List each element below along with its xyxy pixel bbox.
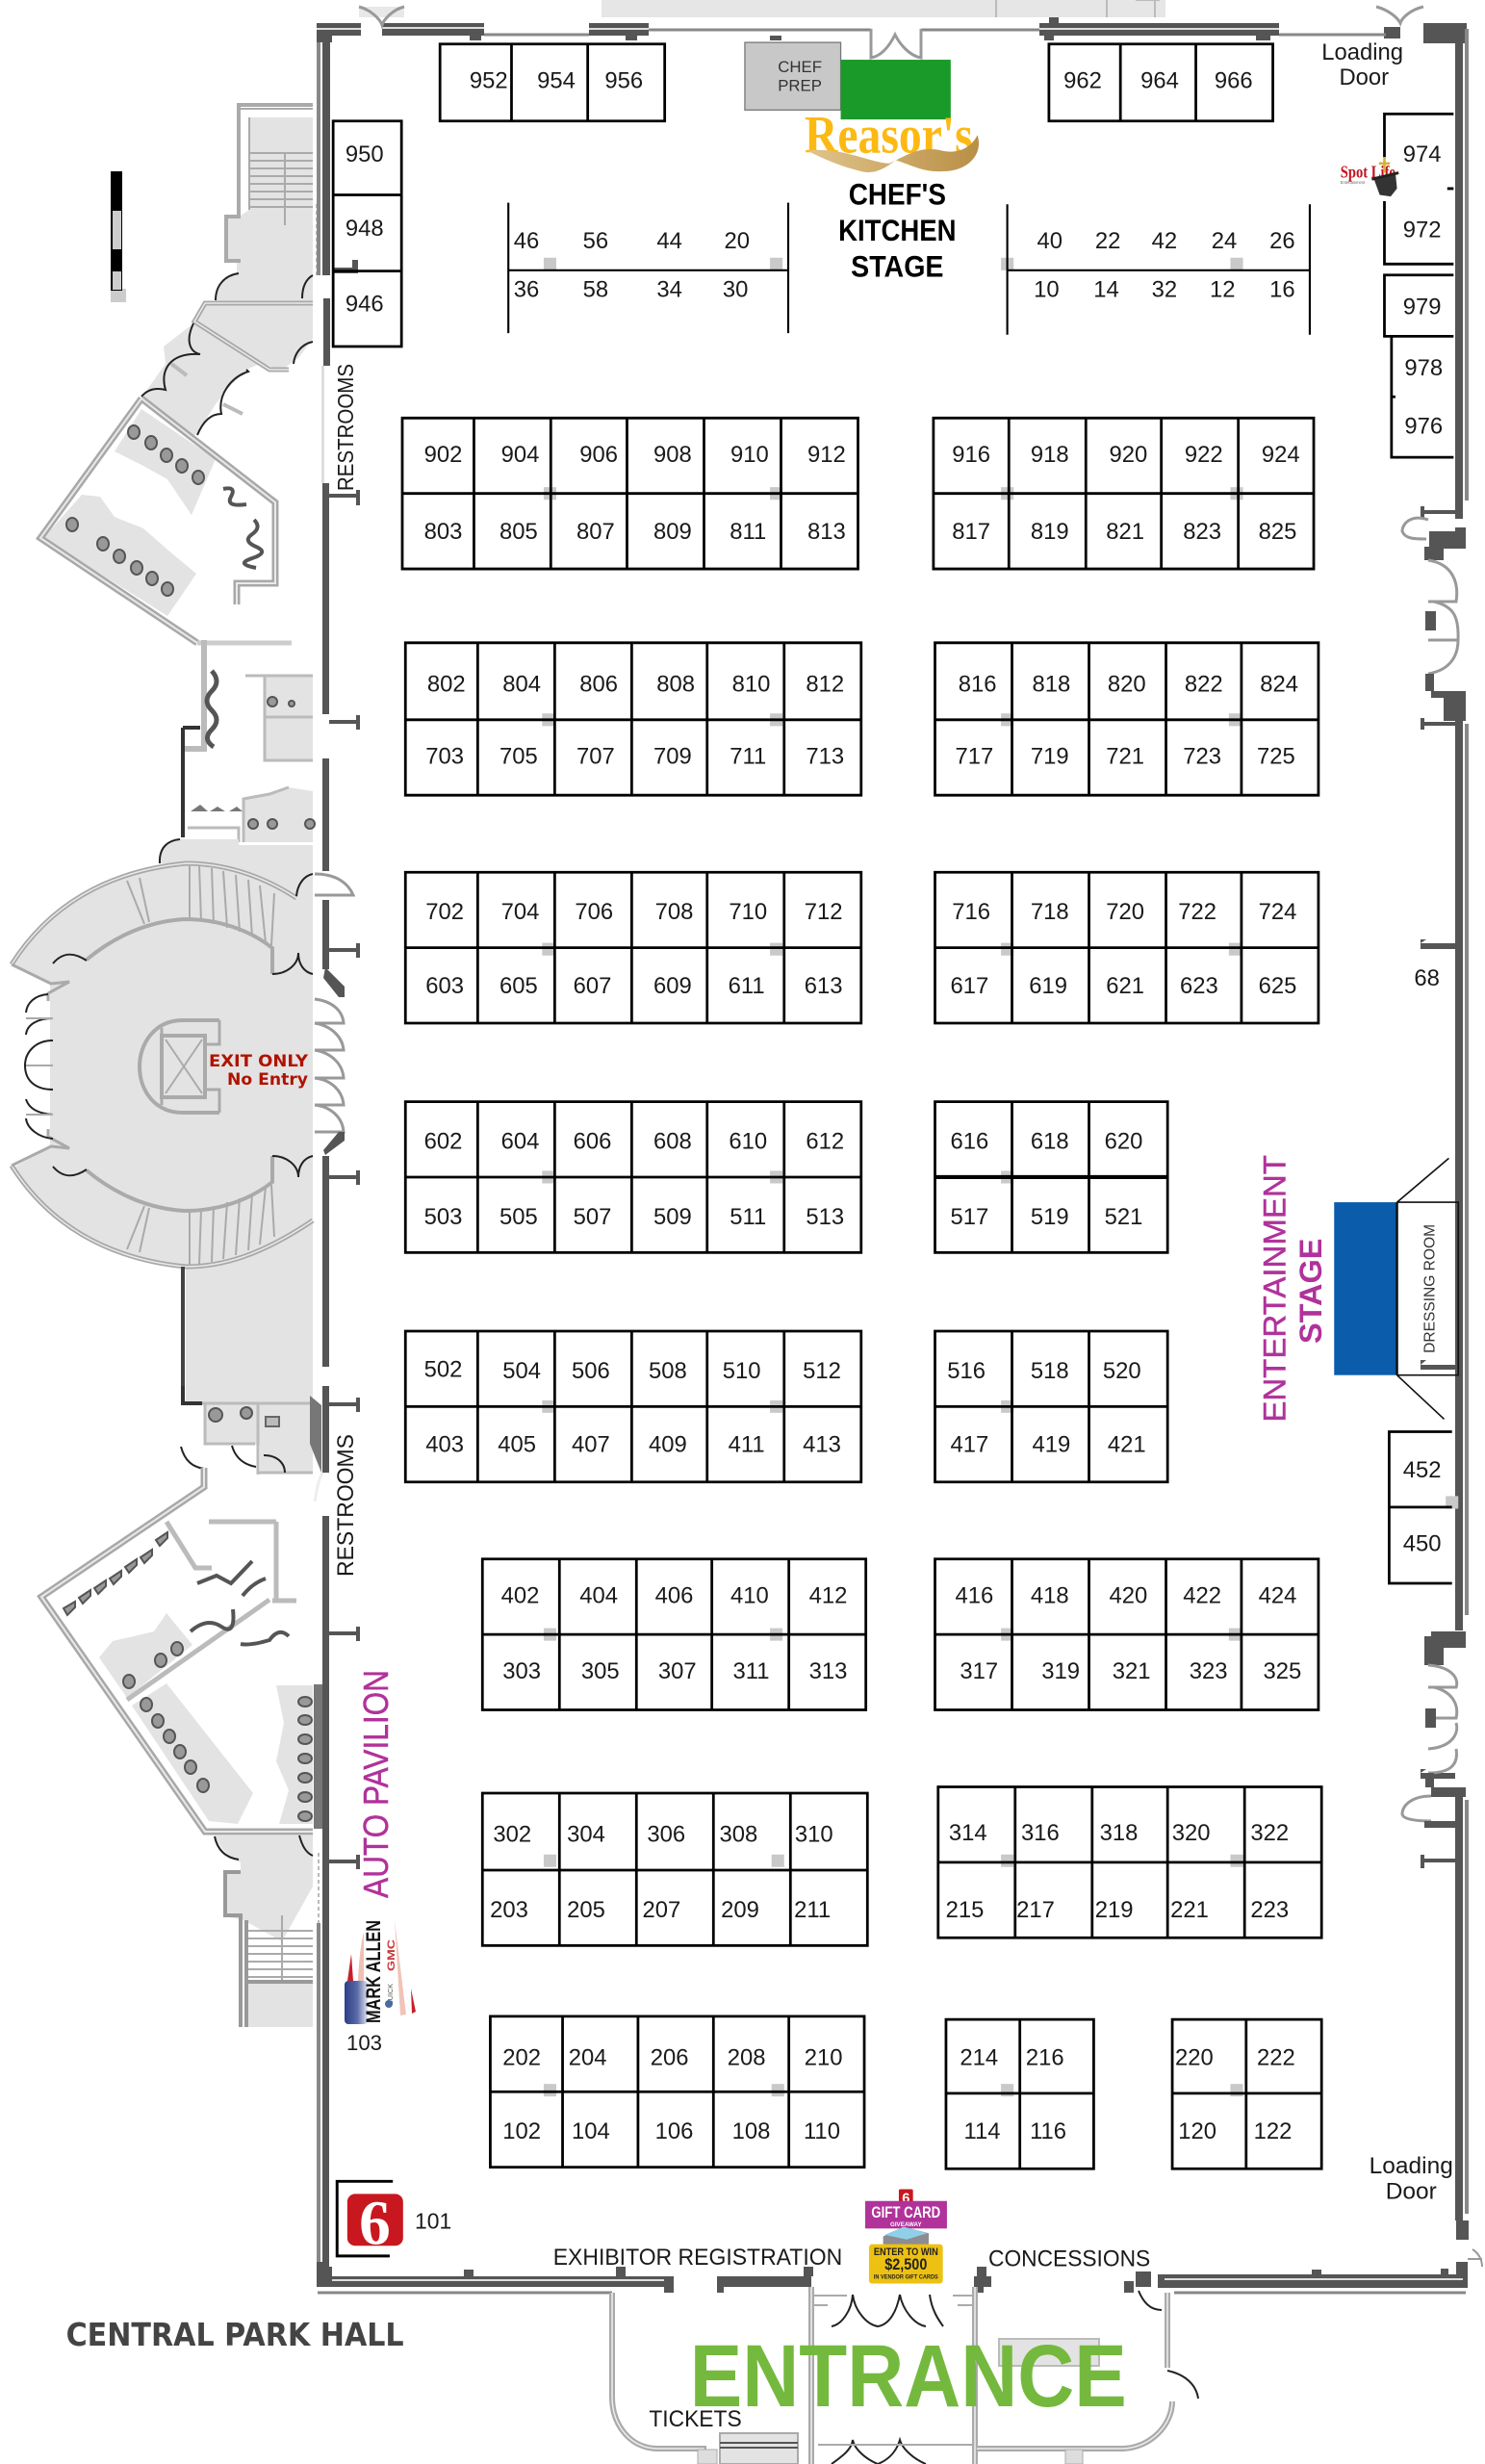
booths: 220-122 <box>1172 2019 1321 2169</box>
booths: 214-116: 114 <box>963 2118 1000 2144</box>
booths: 214-116: 216 <box>1026 2044 1064 2070</box>
label: exit only: EXIT ONLY <box>209 1052 309 1071</box>
booths: right T stand: 32 <box>1152 277 1177 303</box>
booths: 916-825: 920 <box>1109 442 1147 468</box>
booths: 402-313: 303 <box>502 1658 541 1684</box>
booths: 502-413: 411 <box>729 1432 765 1458</box>
booths: 802-713: 806 <box>579 671 618 697</box>
label: 68: 68 <box>1414 965 1440 991</box>
building wing: lower stairwell <box>215 1835 319 2027</box>
booths: 602-513: 507 <box>574 1204 611 1230</box>
heading: chef's kitchen stage: STAGE <box>851 249 943 283</box>
booths: 220-122: 220 <box>1175 2044 1214 2070</box>
label: upper restrooms: RESTROOMS <box>333 364 358 491</box>
booths: 962-966: 966 <box>1215 67 1253 93</box>
booths: 902-813: 902 <box>424 442 462 468</box>
booths: 302-211: 304 <box>567 1822 605 1848</box>
booths: left T stand: 56 <box>583 228 608 254</box>
booths: 902-813: 908 <box>653 442 692 468</box>
booths: right T stand <box>1008 204 1310 335</box>
booths: 816-725: 822 <box>1185 671 1223 697</box>
building wing: rotunda <box>12 839 313 1405</box>
booths: 816-725: 820 <box>1108 671 1146 697</box>
booths: 516-421: 421 <box>1108 1432 1146 1458</box>
rotunda: left door scallops <box>25 994 53 1139</box>
booths: 802-713: 705 <box>499 744 538 770</box>
booths: 402-313: 404 <box>579 1582 618 1608</box>
booths: 616-521: 517 <box>951 1204 988 1230</box>
booths: 502-413: 504 <box>502 1358 541 1384</box>
booths: 616-521: 519 <box>1031 1204 1069 1230</box>
booths: 816-725: 721 <box>1106 744 1144 770</box>
booths: 952-956: 956 <box>604 67 643 93</box>
booths: 916-825: 823 <box>1183 519 1221 545</box>
rotunda: central elevator <box>140 1020 219 1113</box>
booths: 416-325: 424 <box>1259 1582 1296 1608</box>
booths: 902-813: 906 <box>579 442 618 468</box>
booths: 716-625: 720 <box>1106 899 1144 925</box>
booths: 402-313: 410 <box>730 1582 769 1608</box>
booths: 602-513: 503 <box>424 1204 462 1230</box>
booths: 716-625: 724 <box>1259 899 1296 925</box>
booths: 802-713 <box>405 643 861 795</box>
booths: 946-950 <box>333 121 401 346</box>
booths: 302-211: 302 <box>493 1822 531 1848</box>
booths: 214-116 <box>946 2019 1093 2169</box>
booths: 302-211: 308 <box>720 1822 757 1848</box>
booths: 416-325: 325 <box>1263 1658 1301 1684</box>
booths: 450-452 <box>1389 1431 1452 1583</box>
label: top loading door <box>1321 39 1403 90</box>
booths: 202-110: 108 <box>732 2118 770 2144</box>
booths: 502-413: 512 <box>803 1358 841 1384</box>
booths: 202-110: 202 <box>502 2044 541 2070</box>
booths: 402-313: 307 <box>658 1658 697 1684</box>
booths: 702-613: 710 <box>729 899 767 925</box>
logo: Mark Allen: 103 <box>346 2031 382 2055</box>
entertainment stage block <box>1334 1202 1397 1375</box>
booths: 202-110: 204 <box>569 2044 607 2070</box>
booths: 416-325: 422 <box>1183 1582 1221 1608</box>
booths: 202-110: 210 <box>805 2044 842 2070</box>
booths: left T stand <box>508 203 788 333</box>
rotunda: lower stair arc <box>12 1129 313 1267</box>
gift card giveaway: 6 <box>902 2191 909 2206</box>
booths: 702-613: 706 <box>575 899 613 925</box>
booths: 616-521 <box>935 1102 1167 1252</box>
booths: 976-979: 976 <box>1404 414 1443 440</box>
logo: channel 6 booth 101: 6 <box>359 2190 391 2259</box>
booths: 802-713: 812 <box>806 671 844 697</box>
booths: 314-223 <box>938 1786 1321 1938</box>
booths: left T stand: 46 <box>514 228 539 254</box>
booths: 314-223: 314 <box>949 1820 987 1846</box>
booths: 802-713: 713 <box>806 744 844 770</box>
gift card giveaway <box>865 2189 947 2283</box>
booths: 962-966: 962 <box>1063 67 1102 93</box>
booths: 702-613: 607 <box>574 973 611 999</box>
chef prep box: PREP <box>778 78 822 95</box>
heading: chef's kitchen stage <box>838 177 957 283</box>
logo: Mark Allen: MARK ALLEN <box>363 1920 385 2023</box>
booths: right T stand: 26 <box>1269 228 1295 254</box>
booths: 502-413: 502 <box>424 1356 462 1382</box>
booths: 952-956 <box>440 44 665 121</box>
booths: 802-713: 810 <box>732 671 770 697</box>
booths: 916-825: 817 <box>952 519 990 545</box>
booths: 450-452: 450 <box>1403 1531 1442 1557</box>
booths: 402-313: 412 <box>809 1582 847 1608</box>
booths: 902-813: 805 <box>499 519 538 545</box>
heading: entrance: ENTRANCE <box>690 2327 1127 2426</box>
booths: 802-713: 709 <box>653 744 692 770</box>
booths: left T stand: 58 <box>583 277 608 303</box>
booths: 946-950: 946 <box>346 291 384 317</box>
building wing: middle service rooms <box>183 640 315 842</box>
booths: 702-613: 708 <box>655 899 693 925</box>
booths: 702-613 <box>405 872 861 1023</box>
booths: 602-513: 513 <box>806 1204 844 1230</box>
right doors: upper set <box>1425 560 1458 691</box>
booths: 302-211: 306 <box>647 1822 685 1848</box>
hall walls: bottom <box>317 2262 1468 2293</box>
booths: 962-966: 964 <box>1140 67 1179 93</box>
booths: 916-825: 916 <box>952 442 990 468</box>
booths: 402-313 <box>482 1559 866 1709</box>
booths: 972-974: 974 <box>1403 141 1442 167</box>
title: central park hall: CENTRAL PARK HALL <box>66 2317 404 2353</box>
booths: 946-950: 948 <box>346 216 384 242</box>
booths: left T stand: 34 <box>656 277 682 303</box>
booths: 716-625: 625 <box>1259 973 1296 999</box>
booths: 202-110: 208 <box>728 2044 765 2070</box>
right doors: lower set <box>1428 1665 1457 1773</box>
booths: 502-413: 407 <box>572 1432 610 1458</box>
logo: Mark Allen <box>345 1920 416 2055</box>
logo: Mark Allen: GMC <box>386 1939 397 1971</box>
booths: 314-223: 316 <box>1021 1820 1060 1846</box>
scale bar <box>111 171 126 302</box>
booths: right T stand: 12 <box>1210 277 1236 303</box>
booths: 416-325: 323 <box>1190 1658 1228 1684</box>
booths: right T stand: 22 <box>1095 228 1120 254</box>
booths: 716-625: 716 <box>952 899 990 925</box>
booths: 314-223: 320 <box>1172 1820 1211 1846</box>
hall walls: top <box>317 0 1467 58</box>
booths: 902-813: 904 <box>501 442 539 468</box>
booths: 302-211 <box>482 1793 867 1945</box>
booths: 220-122: 122 <box>1254 2118 1292 2144</box>
booths: 202-110: 206 <box>651 2044 688 2070</box>
label: bottom loading door <box>1370 2153 1453 2204</box>
booths: 602-513: 602 <box>424 1129 462 1155</box>
heading: chef's kitchen stage: CHEF'S <box>849 177 946 211</box>
booths: 516-421: 419 <box>1032 1432 1070 1458</box>
booths: 214-116: 116 <box>1030 2118 1066 2144</box>
booths: 314-223: 221 <box>1170 1897 1209 1923</box>
gift card giveaway: IN VENDOR GIFT CARDS <box>874 2274 938 2281</box>
logo: Spot Life: Entertainment <box>1341 180 1366 185</box>
booths: 902-813 <box>402 418 858 569</box>
booths: 602-513: 511 <box>730 1204 766 1230</box>
booths: 314-223: 318 <box>1100 1820 1138 1846</box>
heading: entertainment stage: ENTERTAINMENT <box>1257 1155 1293 1423</box>
booths: 816-725: 723 <box>1183 744 1221 770</box>
booths: 602-513: 608 <box>653 1129 692 1155</box>
booths: 816-725: 816 <box>959 671 996 697</box>
booths: 402-313: 311 <box>732 1658 769 1684</box>
chef prep box <box>745 42 841 110</box>
booths: 302-211: 211 <box>794 1897 831 1923</box>
booths: left T stand: 36 <box>514 277 539 303</box>
booths: 416-325: 418 <box>1031 1582 1069 1608</box>
booths: 516-421: 520 <box>1103 1358 1141 1384</box>
booths: left T stand: 20 <box>725 228 750 254</box>
column markers <box>542 258 1458 2096</box>
booths: 976-979: 978 <box>1404 355 1443 381</box>
booths: 816-725: 725 <box>1257 744 1295 770</box>
booths: 916-825: 918 <box>1031 442 1069 468</box>
booths: 946-950: 950 <box>346 141 384 167</box>
booths: 202-110: 110 <box>804 2118 840 2144</box>
gift card giveaway: GIFT CARD <box>871 2204 940 2221</box>
booths: 202-110: 104 <box>572 2118 610 2144</box>
label: top loading door: Loading <box>1321 39 1403 65</box>
booths: 220-122: 120 <box>1178 2118 1216 2144</box>
booths: 602-513: 509 <box>653 1204 692 1230</box>
booths: 616-521: 521 <box>1105 1204 1142 1230</box>
label: tickets: TICKETS <box>649 2406 742 2432</box>
booths: 702-613: 704 <box>501 899 539 925</box>
dressing room: DRESSING ROOM <box>1422 1224 1439 1353</box>
booths: 702-613: 712 <box>805 899 842 925</box>
booths: 302-211: 209 <box>721 1897 759 1923</box>
booths: right T stand: 42 <box>1152 228 1177 254</box>
heading: entertainment stage <box>1257 1155 1328 1423</box>
booths: 716-625: 619 <box>1029 973 1067 999</box>
booths: right T stand: 40 <box>1037 228 1063 254</box>
label: exit only: No Entry <box>227 1070 308 1090</box>
booths: 802-713: 703 <box>425 744 464 770</box>
booths: 952-956: 952 <box>470 67 508 93</box>
booths: 702-613: 611 <box>729 973 765 999</box>
booths: 716-625 <box>935 872 1319 1023</box>
booths: 616-521: 620 <box>1105 1129 1142 1155</box>
building wing: upper vestibule <box>141 301 313 438</box>
gift card giveaway: GIVEAWAY <box>890 2221 922 2228</box>
label: exhibitor registration: EXHIBITOR REGISTRATION <box>553 2245 842 2271</box>
booths: 916-825: 821 <box>1106 519 1144 545</box>
logo: Spot Life <box>1341 157 1398 196</box>
hall walls: right <box>1402 23 1482 2288</box>
booths: 916-825 <box>934 418 1314 569</box>
booths: 602-513: 606 <box>574 1129 611 1155</box>
label: top loading door: Door <box>1339 64 1389 90</box>
booths: left T stand: 30 <box>723 277 748 303</box>
booths: 302-211: 310 <box>795 1822 833 1848</box>
label: auto pavilion: AUTO PAVILION <box>356 1670 396 1898</box>
booths: 502-413: 409 <box>649 1432 687 1458</box>
booths: 602-513: 604 <box>501 1129 539 1155</box>
booths: 502-413: 506 <box>572 1358 610 1384</box>
booths: 502-413: 403 <box>425 1432 464 1458</box>
chef prep box: CHEF <box>778 59 822 76</box>
booths: 802-713: 804 <box>502 671 541 697</box>
rotunda: lower corridor wall <box>181 1267 185 1403</box>
booths: 972-974: 972 <box>1403 218 1442 244</box>
label: lower restrooms: RESTROOMS <box>333 1434 359 1577</box>
booths: 802-713: 808 <box>656 671 695 697</box>
booths: 416-325: 420 <box>1109 1582 1147 1608</box>
label: bottom loading door: Loading <box>1370 2153 1453 2179</box>
logo: Mark Allen: BUICK <box>388 1984 395 2005</box>
booths: 202-110 <box>490 2016 864 2168</box>
booths: 816-725: 719 <box>1031 744 1069 770</box>
booths: 952-956: 954 <box>537 67 576 93</box>
logo: channel 6 booth 101 <box>337 2181 451 2259</box>
booths: right T stand: 16 <box>1269 277 1295 303</box>
building wing: upper stairwell <box>216 104 317 302</box>
booths: 314-223: 223 <box>1250 1897 1289 1923</box>
logo: Reasor's: Reasor's <box>805 106 973 165</box>
booths: 502-413: 508 <box>649 1358 687 1384</box>
booths: 702-613: 605 <box>499 973 538 999</box>
booths: 816-725: 818 <box>1032 671 1070 697</box>
booths: 314-223: 217 <box>1016 1897 1055 1923</box>
booths: 816-725: 824 <box>1260 671 1298 697</box>
booths: 502-413: 413 <box>803 1432 841 1458</box>
booths: 416-325: 319 <box>1041 1658 1080 1684</box>
booths: 302-211: 203 <box>490 1897 528 1923</box>
booths: 402-313: 305 <box>581 1658 620 1684</box>
rotunda: upper stair arc <box>12 839 313 1001</box>
booths: 716-625: 617 <box>951 973 988 999</box>
building wing: lower service room <box>181 1386 321 1475</box>
booths: 416-325: 321 <box>1113 1658 1150 1684</box>
booths: 962-966 <box>1049 44 1273 121</box>
hall walls: left <box>315 23 360 2286</box>
booths: 502-413: 510 <box>723 1358 761 1384</box>
booths: 314-223: 215 <box>946 1897 984 1923</box>
booths: 516-421: 516 <box>947 1358 986 1384</box>
booths: 450-452: 452 <box>1403 1457 1442 1483</box>
booths: 816-725: 717 <box>955 744 993 770</box>
booths: 802-713: 711 <box>730 744 766 770</box>
booths: 976-979: 979 <box>1403 295 1442 321</box>
label: concessions: CONCESSIONS <box>988 2246 1150 2272</box>
booths: 516-421: 417 <box>951 1432 988 1458</box>
booths: 902-813: 809 <box>653 519 692 545</box>
heading: chef's kitchen stage: KITCHEN <box>838 214 957 247</box>
label: bottom loading door: Door <box>1386 2178 1437 2204</box>
gift card giveaway: $2,500 <box>884 2256 927 2273</box>
booths: 702-613: 603 <box>425 973 464 999</box>
booths: 416-325: 416 <box>955 1582 993 1608</box>
booths: 902-813: 811 <box>730 519 766 545</box>
booths: 402-313: 313 <box>809 1658 847 1684</box>
booths: right T stand: 14 <box>1093 277 1119 303</box>
booths: 902-813: 912 <box>807 442 846 468</box>
booths: 716-625: 623 <box>1180 973 1218 999</box>
booths: 616-521: 616 <box>951 1129 988 1155</box>
booths: right T stand: 10 <box>1034 277 1060 303</box>
entrance vestibule <box>612 2287 1198 2464</box>
booths: 302-211: 205 <box>567 1897 605 1923</box>
booths: 802-713: 707 <box>576 744 615 770</box>
booths: 816-725 <box>935 643 1319 795</box>
booths: 916-825: 825 <box>1259 519 1296 545</box>
booths: 702-613: 613 <box>805 973 842 999</box>
booths: 702-613: 702 <box>425 899 464 925</box>
booths: 602-513: 610 <box>729 1129 767 1155</box>
booths: 916-825: 922 <box>1185 442 1223 468</box>
booths: 314-223: 322 <box>1250 1820 1289 1846</box>
booths: 902-813: 807 <box>576 519 615 545</box>
booths: 976-979 <box>1384 275 1453 457</box>
green kitchen stage <box>841 60 951 119</box>
booths: 902-813: 803 <box>424 519 462 545</box>
booths: 402-313: 406 <box>655 1582 693 1608</box>
gift card giveaway: ENTER TO WIN <box>874 2246 938 2258</box>
booths: 502-413: 405 <box>498 1432 536 1458</box>
booths: 902-813: 813 <box>807 519 846 545</box>
booths: 602-513 <box>405 1102 861 1252</box>
booths: 716-625: 718 <box>1031 899 1069 925</box>
dressing room <box>1397 1158 1458 1419</box>
logo: Spot Life: Spot Life <box>1341 163 1395 182</box>
booths: 302-211: 207 <box>643 1897 680 1923</box>
heading: entertainment stage: STAGE <box>1293 1239 1328 1344</box>
booths: 516-421: 518 <box>1031 1358 1069 1384</box>
booths: right T stand: 24 <box>1212 228 1237 254</box>
booths: 916-825: 819 <box>1031 519 1069 545</box>
booths: 516-421 <box>935 1331 1167 1482</box>
booths: 702-613: 609 <box>653 973 692 999</box>
booths: 314-223: 219 <box>1095 1897 1134 1923</box>
label: exit only <box>209 1052 309 1090</box>
booths: 416-325 <box>935 1559 1319 1709</box>
booths: 902-813: 910 <box>730 442 769 468</box>
building wing: upper restrooms <box>40 398 292 643</box>
logo: channel 6 booth 101: 101 <box>415 2208 451 2233</box>
booths: 716-625: 621 <box>1106 973 1144 999</box>
booths: 220-122: 222 <box>1257 2044 1295 2070</box>
booths: 202-110: 102 <box>502 2118 541 2144</box>
booths: 202-110: 106 <box>655 2118 693 2144</box>
booths: 802-713: 802 <box>427 671 466 697</box>
booths: 416-325: 317 <box>960 1658 998 1684</box>
booths: 972-974 <box>1384 114 1453 264</box>
building wing: lower restrooms <box>41 1468 322 1832</box>
booths: 602-513: 612 <box>806 1129 844 1155</box>
booths: left T stand: 44 <box>656 228 682 254</box>
booths: 402-313: 402 <box>501 1582 539 1608</box>
booths: 502-413 <box>405 1331 861 1482</box>
booths: 602-513: 505 <box>499 1204 538 1230</box>
booths: 616-521: 618 <box>1031 1129 1069 1155</box>
booths: 916-825: 924 <box>1262 442 1300 468</box>
booths: 214-116: 214 <box>960 2044 998 2070</box>
booths: 716-625: 722 <box>1178 899 1216 925</box>
